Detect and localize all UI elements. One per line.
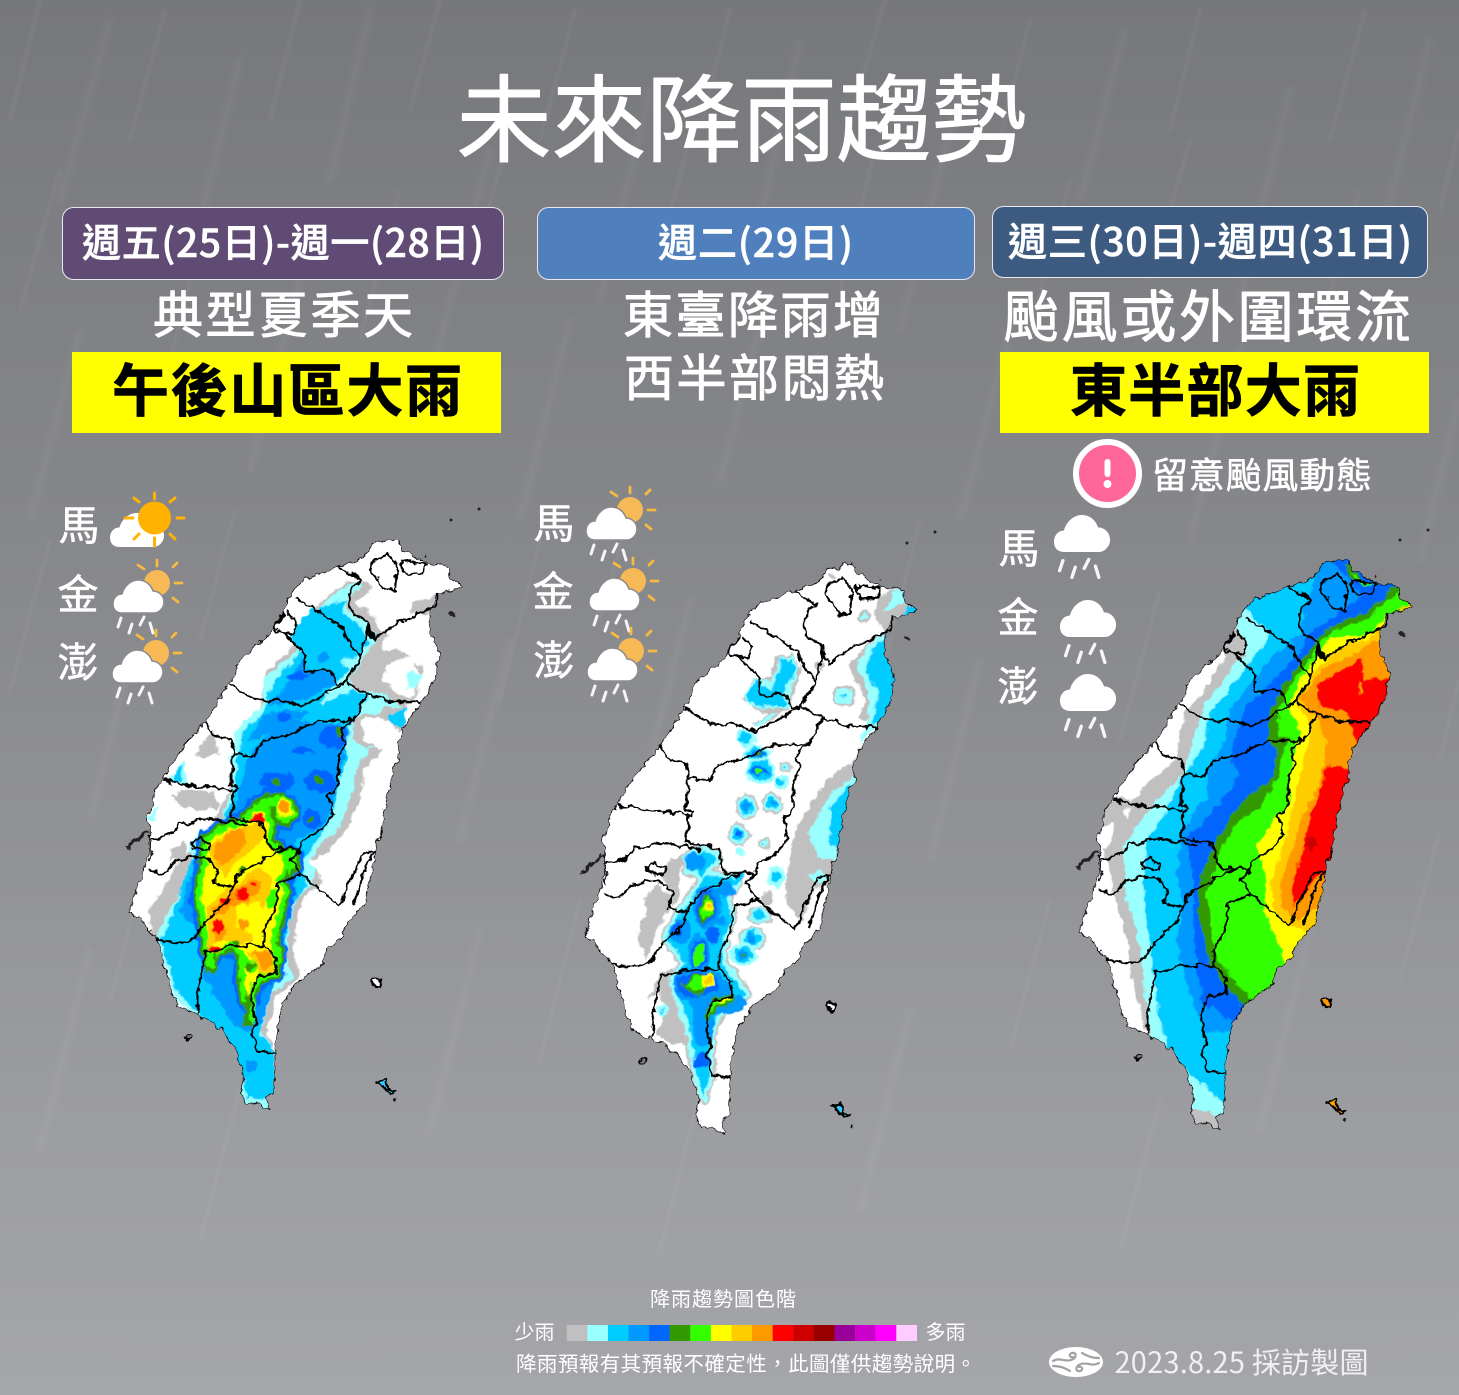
icon: rain cloud, right Matsu [1054, 515, 1110, 577]
labels: Matsu Kinmen Penghu, left: 金 [58, 561, 98, 621]
grey light rain zones [638, 585, 942, 1045]
icon: sun cloud rain, middle Penghu [587, 628, 656, 701]
county boundaries [603, 578, 892, 1077]
icon: rain cloud, right Kinmen [1060, 600, 1116, 662]
panel: Tuesday heading [538, 208, 974, 280]
subtitle: east rain increases and west hot [623, 276, 884, 411]
blob rainfall cells [657, 614, 868, 1016]
legend title: 降雨趨勢圖色階 [650, 1283, 796, 1312]
sky blue main zone [160, 599, 407, 1099]
icon: sun cloud rain, left Penghu [112, 630, 181, 703]
contour: red [1291, 658, 1390, 908]
blue and green cores of the southern mass [669, 853, 747, 1067]
contour: sky blue [1142, 573, 1318, 1104]
pale cyan zones [148, 580, 422, 1110]
contour: deep blue [1186, 559, 1398, 1022]
subtitle: east rain increases and west hot: 東臺降雨增 [623, 276, 883, 348]
southern rain mass [667, 852, 745, 1096]
labels: Matsu Kinmen Penghu, middle: 澎 [534, 627, 574, 687]
icon: alert circle [1076, 442, 1139, 505]
legend low label: 少雨 [514, 1316, 554, 1345]
icon: sun cloud rain, middle Matsu [586, 487, 655, 560]
contour: amber [1269, 604, 1412, 934]
icon: rain cloud, right Penghu [1060, 674, 1116, 736]
colour swatches [567, 1325, 917, 1341]
icon: sun and cloud, left Matsu [110, 493, 184, 547]
callout: eastern half heavy rain: 東半部大雨 [1070, 346, 1360, 428]
blue main zone [180, 658, 350, 1034]
contour: yellow [1254, 614, 1386, 965]
deep blue patches [258, 673, 347, 829]
icon: sun cloud rain, left Kinmen [113, 560, 182, 633]
labels: Matsu Kinmen Penghu, right [998, 515, 1040, 713]
map: Wednesday to Thursday rainfall [1075, 558, 1412, 1130]
white pocket [382, 656, 422, 699]
labels: Matsu Kinmen Penghu, left: 馬 [58, 492, 100, 552]
contour: bright green [1204, 570, 1410, 1000]
subtitle: typical summer: 典型夏季天 [153, 276, 413, 348]
icon: sun cloud rain, middle Kinmen [589, 558, 658, 631]
legend: colour scale [514, 1316, 966, 1345]
disclaimer note: 降雨預報有其預報不確定性，此圖僅供趨勢說明。 [516, 1347, 976, 1377]
offshore islands [1077, 574, 1405, 1123]
labels: Matsu Kinmen Penghu, right: 馬 [998, 515, 1040, 575]
alert text: 留意颱風動態 [1152, 447, 1372, 499]
panel: Friday to Monday heading: 週五(25日)-週一(28日) [82, 213, 484, 269]
icon: Central Weather Bureau logo [1049, 1347, 1103, 1377]
contour: blue [1174, 562, 1363, 1034]
labels: Matsu Kinmen Penghu, middle: 馬 [534, 490, 574, 550]
sky blue zones [828, 604, 916, 850]
coastline [1080, 560, 1412, 1130]
map: Friday to Monday rainfall [127, 540, 462, 1110]
contour: pale cyan [1122, 608, 1272, 1117]
contour: orange [1279, 640, 1390, 924]
offshore islands [582, 579, 910, 1127]
labels: Matsu Kinmen Penghu, left: 澎 [58, 629, 98, 689]
coastline [130, 540, 462, 1110]
small scattered islets [450, 508, 1430, 544]
subtitle: east rain increases and west hot: 西半部悶熱 [624, 339, 884, 411]
pale cyan zones [806, 588, 904, 884]
county boundaries [148, 553, 437, 1053]
labels: Matsu Kinmen Penghu, middle [532, 490, 574, 687]
title: 未來降雨趨勢 [456, 45, 1026, 182]
credit date: 2023.8.25 採訪製圖 [1114, 1340, 1368, 1382]
orange and red spots [207, 822, 275, 974]
labels: Matsu Kinmen Penghu, right: 澎 [998, 653, 1038, 713]
panel: Tuesday heading: 週二(29日) [658, 213, 853, 269]
contour: grey [1096, 624, 1246, 1128]
county boundaries [1098, 573, 1387, 1073]
offshore islands [127, 554, 455, 1103]
map: Tuesday rainfall [582, 565, 942, 1134]
labels: Matsu Kinmen Penghu, right: 金 [998, 584, 1038, 644]
contour: dark green [1196, 562, 1400, 1008]
legend high label: 多雨 [926, 1316, 966, 1345]
panel: Wednesday to Thursday heading: 週三(30日)-週四(31日) [1008, 212, 1412, 268]
labels: Matsu Kinmen Penghu, left [58, 492, 100, 689]
grey light rain zones [148, 580, 437, 1110]
callout: eastern half heavy rain [1000, 346, 1429, 433]
subtitle: typhoon or outer circulation: 颱風或外圍環流 [1003, 273, 1411, 354]
labels: Matsu Kinmen Penghu, middle: 金 [532, 558, 574, 618]
callout: afternoon mountain rain: 午後山區大雨 [112, 346, 462, 428]
coastline [585, 565, 917, 1134]
hot core contour bands [202, 793, 302, 1027]
